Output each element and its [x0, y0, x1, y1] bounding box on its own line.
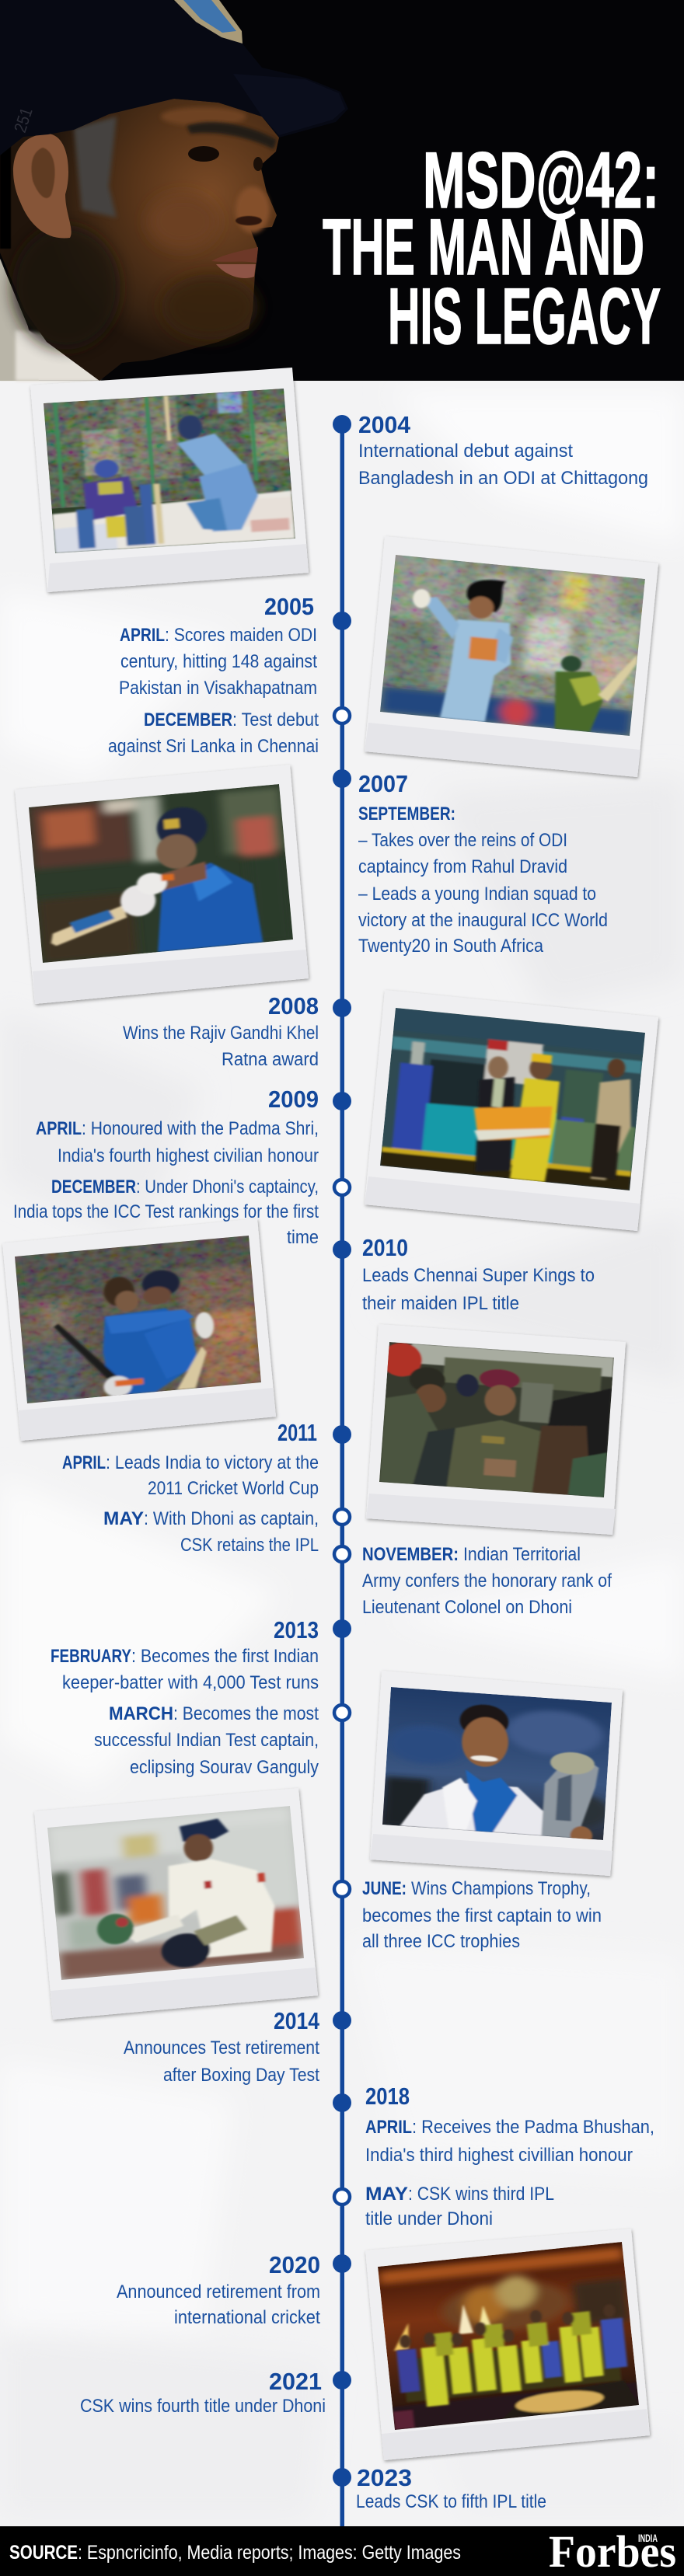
- entry: 2013: : Becomes the first Indian: [131, 1646, 319, 1667]
- entry: 2014: 2014: [274, 2007, 320, 2034]
- entry: 2011: [62, 1419, 612, 1618]
- footer: [0, 2526, 684, 2576]
- cap number: 251: [10, 105, 37, 135]
- logo: Forbes India: Forbes: [549, 2526, 676, 2576]
- entry: 2007: Twenty20 in South Africa: [358, 936, 544, 957]
- entry: 2013: FEBRUARY: [51, 1646, 131, 1667]
- entry: 2011: : With Dhoni as captain,: [144, 1508, 319, 1529]
- entry: 2011: : Leads India to victory at the: [106, 1452, 319, 1473]
- photo: celebration in light-blue kit: [365, 536, 658, 777]
- entry: 2005: against Sri Lanka in Chennai: [108, 736, 319, 757]
- entry: 2010: [333, 1234, 595, 1314]
- entry: 2009: : Honoured with the Padma Shri,: [82, 1118, 319, 1139]
- photo: Dhoni portrait in profile: [0, 0, 348, 381]
- entry: 2018: APRIL: [365, 2117, 412, 2138]
- entry: 2011: Lieutenant Colonel on Dhoni: [362, 1597, 572, 1618]
- entry: 2011: NOVEMBER:: [362, 1544, 459, 1565]
- entry: 2018: title under Dhoni: [365, 2208, 493, 2229]
- entry: 2020: [117, 2251, 351, 2328]
- entry: 2011: APRIL: [62, 1452, 106, 1473]
- entry: 2008: Ratna award: [222, 1049, 319, 1070]
- entry: 2009: APRIL: [36, 1118, 82, 1139]
- title: [323, 136, 661, 361]
- entry: 2005: APRIL: [120, 625, 165, 646]
- entry: 2007: – Leads a young Indian squad to: [358, 884, 596, 905]
- entry: 2005: 2005: [264, 593, 314, 620]
- entry: 2013: eclipsing Sourav Ganguly: [130, 1757, 319, 1778]
- entry: 2004: 2004: [358, 411, 411, 438]
- source line: SOURCE: [9, 2542, 78, 2564]
- entry: 2021: [80, 2368, 351, 2417]
- entry: 2013: all three ICC trophies: [362, 1931, 520, 1952]
- entry: 2005: : Test debut: [232, 709, 319, 730]
- entry: 2011: 2011: [277, 1419, 317, 1446]
- entry: 2009: time: [287, 1227, 319, 1248]
- entry: 2010: their maiden IPL title: [362, 1293, 519, 1314]
- entry: 2007: victory at the inaugural ICC World: [358, 910, 608, 931]
- entry: 2018: 2018: [365, 2083, 410, 2110]
- entry: 2011: 2011 Cricket World Cup: [148, 1478, 319, 1499]
- entry: 2020: Announced retirement from: [117, 2281, 320, 2302]
- entry: 2013: keeper-batter with 4,000 Test runs: [62, 1672, 319, 1693]
- entry: 2009: : Under Dhoni's captaincy,: [136, 1176, 319, 1197]
- entry: 2020: 2020: [269, 2251, 320, 2278]
- entry: 2005: Pakistan in Visakhapatnam: [119, 678, 317, 699]
- entry: 2014: after Boxing Day Test: [163, 2065, 319, 2086]
- entry: 2007: captaincy from Rahul Dravid: [358, 856, 567, 877]
- photo: Dhoni batting: [15, 765, 309, 1004]
- entry: 2014: [124, 2007, 351, 2086]
- entry: 2004: Bangladesh in an ODI at Chittagong: [358, 468, 648, 489]
- entry: 2008: 2008: [268, 992, 319, 1020]
- entry: 2009: 2009: [268, 1086, 319, 1113]
- entry: 2013: : Becomes the most: [173, 1703, 319, 1724]
- entry: 2010: 2010: [362, 1234, 408, 1261]
- entry: 2008: [123, 992, 351, 1070]
- entry: 2018: India's third highest civillian honour: [365, 2145, 633, 2166]
- entry: 2007: SEPTEMBER:: [358, 803, 455, 824]
- entry: 2011: Army confers the honorary rank of: [362, 1570, 612, 1591]
- entry: 2018: [333, 2083, 654, 2229]
- photo: Dhoni fielding in whites: [34, 1788, 318, 2020]
- entry: 2005: : Scores maiden ODI: [165, 625, 317, 646]
- timeline spine: [340, 424, 344, 2526]
- entry: 2023: [333, 2464, 546, 2512]
- cap: [0, 0, 348, 155]
- ear: [13, 134, 72, 239]
- header panel: [0, 0, 684, 381]
- entry: 2004: International debut against: [358, 441, 573, 462]
- cap badge: [174, 0, 243, 44]
- eyebrow and eyes: [187, 122, 277, 149]
- entry: 2011: CSK retains the IPL: [180, 1535, 319, 1556]
- entry: 2013: MARCH: [109, 1703, 173, 1724]
- entry: 2013: JUNE:: [362, 1878, 407, 1899]
- entry: 2011: Indian Territorial: [463, 1544, 581, 1565]
- entry: 2009: India's fourth highest civilian honour: [58, 1145, 319, 1166]
- entry: 2014: Announces Test retirement: [124, 2037, 319, 2058]
- photo: Dhoni with the Champions Trophy: [370, 1671, 623, 1876]
- entry: 2013: [51, 1616, 602, 1952]
- entry: 2018: : CSK wins third IPL: [408, 2184, 554, 2205]
- photo: batting against Sri Lanka: [30, 368, 309, 592]
- entry: 2005: [108, 593, 351, 757]
- photo: cheque presentation: [365, 990, 658, 1231]
- entry: 2018: : Receives the Padma Bhushan,: [412, 2117, 654, 2138]
- entry: 2005: century, hitting 148 against: [120, 651, 317, 672]
- entry: 2009: DECEMBER: [51, 1176, 136, 1197]
- lips: [211, 247, 258, 263]
- entry: 2013: becomes the first captain to win: [362, 1905, 602, 1926]
- photo: World Cup win embrace: [2, 1218, 276, 1441]
- entry: 2013: Wins Champions Trophy,: [411, 1878, 591, 1899]
- photo: Dhoni with the Territorial Army: [366, 1324, 626, 1535]
- entry: 2011: MAY: [103, 1508, 144, 1529]
- CSK squad: [393, 2302, 630, 2410]
- entry: 2013: 2013: [274, 1616, 319, 1644]
- entry: 2007: 2007: [358, 770, 408, 797]
- entry: 2023: Leads CSK to fifth IPL title: [356, 2491, 546, 2512]
- entry: 2018: MAY: [365, 2184, 408, 2205]
- entry: 2004: [333, 411, 648, 489]
- entry: 2023: 2023: [357, 2464, 412, 2491]
- entry: 2010: Leads Chennai Super Kings to: [362, 1265, 595, 1286]
- entry: 2009: [13, 1086, 351, 1248]
- entry: 2005: DECEMBER: [144, 709, 232, 730]
- entry: 2007: – Takes over the reins of ODI: [358, 830, 567, 851]
- logo: Forbes India: INDIA: [638, 2532, 658, 2544]
- entry: 2013: successful Indian Test captain,: [94, 1730, 319, 1751]
- source line: : Espncricinfo, Media reports; Images: Getty Images: [78, 2542, 461, 2564]
- entry: 2009: India tops the ICC Test rankings for the first: [13, 1201, 319, 1222]
- grey hair at temple: [74, 117, 117, 218]
- photo: CSK team celebrating IPL title: [365, 2229, 650, 2460]
- entry: 2021: CSK wins fourth title under Dhoni: [80, 2396, 326, 2417]
- entry: 2021: 2021: [269, 2368, 322, 2395]
- entry: 2020: international cricket: [174, 2307, 320, 2328]
- entry: 2008: Wins the Rajiv Gandhi Khel: [123, 1023, 319, 1044]
- entry: 2007: [333, 769, 608, 957]
